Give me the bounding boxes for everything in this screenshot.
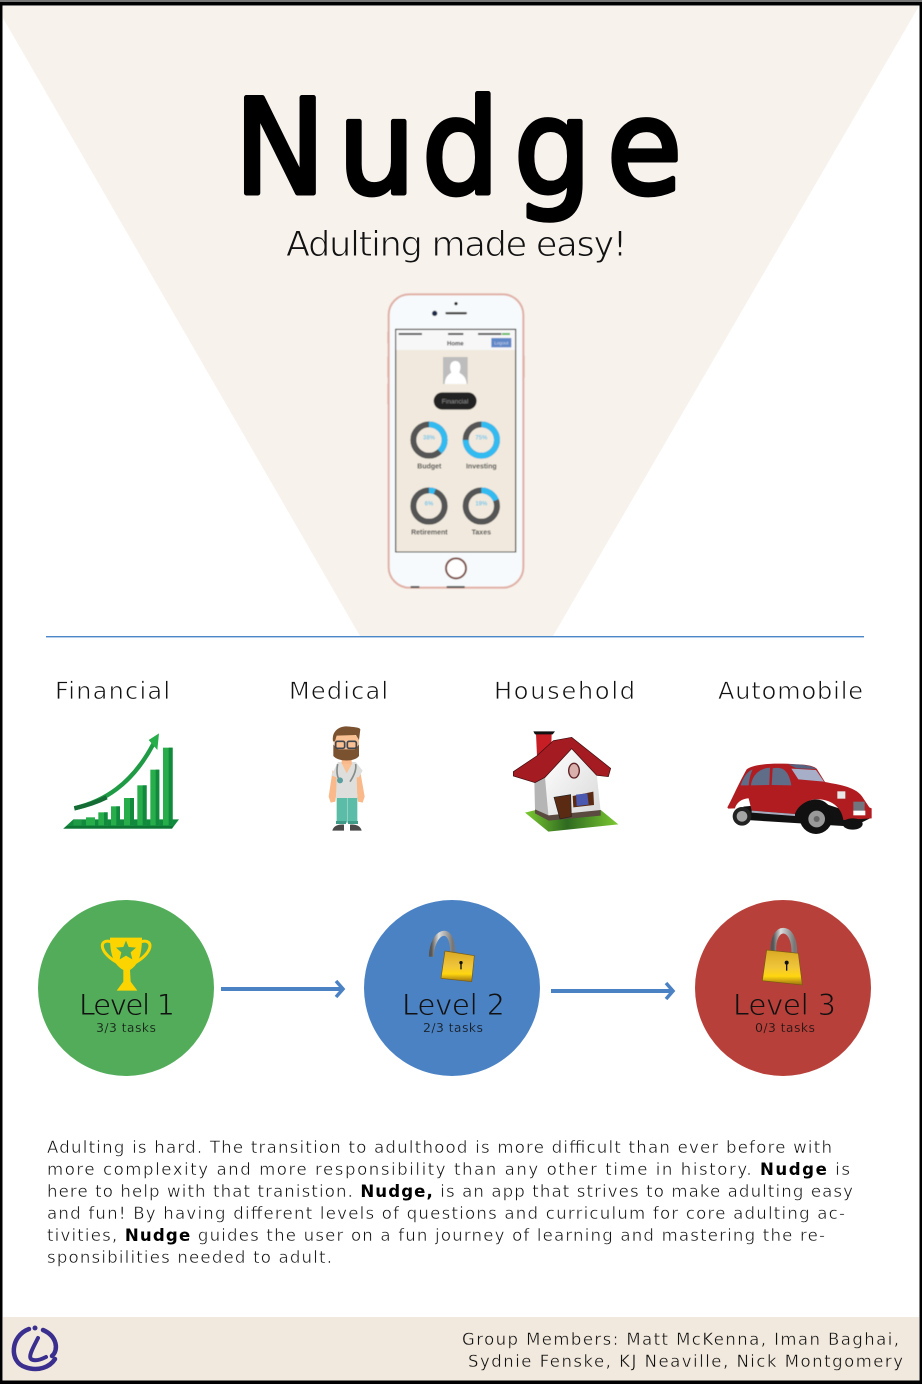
title: Nudge <box>234 72 682 224</box>
divider line <box>46 636 864 637</box>
label: 3/3 tasks: 3/3 tasks <box>96 1020 156 1035</box>
logo <box>14 1326 56 1369</box>
description paragraph <box>47 1138 853 1267</box>
donut: retirement: 6% <box>425 501 434 507</box>
spotlight trapezoid <box>3 6 919 636</box>
level 1 badge <box>38 900 214 1076</box>
category heading: Automobile: Automobile <box>718 677 863 705</box>
subtitle: Adulting made easy! <box>286 225 627 265</box>
donut: budget: Budget <box>417 464 442 471</box>
icon: red car <box>727 764 872 834</box>
description paragraph: Adulting is hard. The transition to adulthood is more difficult than ever before with <box>47 1138 832 1157</box>
phone screen <box>396 329 516 552</box>
description paragraph: sponsibilities needed to adult. <box>47 1248 332 1267</box>
description paragraph: and fun! By having different levels of questions and curriculum for core adulting ac- <box>47 1204 845 1223</box>
label: 2/3 tasks: 2/3 tasks <box>423 1020 483 1035</box>
group members: Sydnie Fenske, KJ Neaville, Nick Montgomery <box>468 1352 903 1371</box>
description paragraph: tivities, Nudge guides the user on a fun journey of learning and mastering the re- <box>47 1226 825 1245</box>
label: Level 2: Level 2 <box>402 988 505 1022</box>
donut: taxes <box>466 490 497 537</box>
donut: taxes: Taxes <box>472 530 491 537</box>
donut: investing: Investing <box>466 464 497 471</box>
donut: investing: 75% <box>475 436 488 442</box>
financial pill: Financial <box>442 398 469 405</box>
label: 0/3 tasks: 0/3 tasks <box>755 1020 815 1035</box>
icon: open padlock <box>431 933 474 982</box>
arrow: level 2 to level 3 <box>551 983 673 999</box>
group members <box>462 1330 903 1371</box>
level 3 badge <box>695 900 871 1076</box>
label: Level 3: Level 3 <box>733 988 836 1022</box>
arrow: level 1 to level 2 <box>221 981 343 997</box>
phone camera and speaker <box>432 302 467 316</box>
icon: green growth chart <box>63 733 179 829</box>
home button <box>446 558 466 578</box>
group members: Group Members: Matt McKenna, Iman Baghai, <box>462 1330 899 1349</box>
icon: house <box>513 731 618 832</box>
level 2 badge <box>364 900 540 1076</box>
description paragraph: more complexity and more responsibility than any other time in history. Nudge is <box>47 1160 850 1179</box>
category heading: Medical: Medical <box>289 677 388 705</box>
icon: closed padlock <box>762 931 802 985</box>
phone screen: Logout <box>494 341 509 346</box>
donut: investing <box>466 424 497 471</box>
donut: retirement: Retirement <box>411 530 448 537</box>
donut: budget <box>413 424 445 471</box>
description paragraph: here to help with that tranistion. Nudge, is an app that strives to make adulting easy <box>47 1182 853 1201</box>
donut: retirement <box>411 490 448 537</box>
icon: doctor <box>329 726 365 831</box>
donut: taxes: 19% <box>475 501 488 507</box>
financial pill <box>434 392 477 410</box>
footer band <box>3 1317 919 1381</box>
icon: trophy <box>102 938 150 991</box>
category heading: Financial: Financial <box>55 677 170 705</box>
phone mockup <box>387 294 525 588</box>
donut: budget: 38% <box>423 436 436 442</box>
avatar <box>443 357 468 384</box>
category heading: Household: Household <box>494 677 635 705</box>
label: Level 1: Level 1 <box>79 988 175 1022</box>
phone screen: Home <box>447 342 464 348</box>
